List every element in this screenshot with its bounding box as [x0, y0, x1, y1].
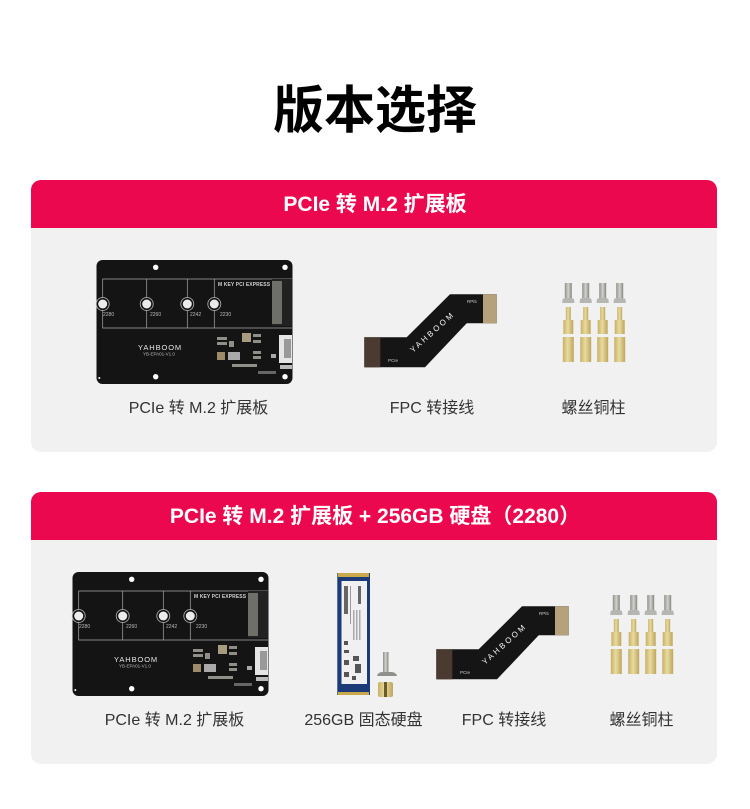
board image: 2260	[150, 312, 161, 318]
FPC cable image: PCIe	[460, 670, 471, 675]
label: PCIe 转 M.2 扩展板	[105, 711, 244, 729]
panel header	[31, 180, 717, 228]
FPC cable image: YAHBOOM	[480, 622, 529, 666]
panel header	[31, 492, 717, 540]
FPC cable image: RPi5	[539, 611, 549, 616]
FPC cable image: PCIe	[388, 358, 399, 363]
board image: YAHBOOM	[138, 343, 182, 352]
label: 螺丝铜柱	[609, 711, 674, 729]
board image: YB-EPA01-V1.0	[143, 352, 175, 356]
label: 螺丝铜柱	[561, 399, 626, 417]
title: 版本选择	[273, 82, 477, 139]
FPC cable image: YAHBOOM	[408, 310, 457, 354]
panel header: PCIe 转 M.2 扩展板 + 256GB 硬盘（2280）	[170, 505, 580, 528]
label: FPC 转接线	[390, 399, 474, 417]
panel header: PCIe 转 M.2 扩展板	[283, 193, 467, 216]
board image: 2230	[196, 624, 207, 630]
board image	[72, 572, 268, 696]
board image: 2230	[220, 312, 231, 318]
board image: 2242	[166, 624, 177, 630]
board image: 2280	[103, 312, 114, 318]
screws and standoffs image	[610, 595, 674, 674]
board image: 2280	[79, 624, 90, 630]
board image	[96, 260, 292, 384]
label: PCIe 转 M.2 扩展板	[129, 399, 268, 417]
FPC cable image	[436, 606, 569, 679]
board image: 2242	[190, 312, 201, 318]
board image: 2260	[126, 624, 137, 630]
label: FPC 转接线	[462, 711, 546, 729]
board image: M KEY PCI EXPRESS	[218, 282, 271, 288]
panel: PCIe to M.2 board version	[31, 180, 717, 452]
mounting screw and nut	[377, 652, 397, 697]
board image: YB-EPA01-V1.0	[119, 664, 151, 668]
panel: board plus SSD version	[31, 492, 717, 764]
FPC cable image	[364, 294, 497, 367]
screws and standoffs image	[562, 283, 626, 362]
FPC cable image: RPi5	[467, 299, 477, 304]
board image: M KEY PCI EXPRESS	[194, 594, 247, 600]
label: 256GB 固态硬盘	[304, 710, 423, 729]
board image: YAHBOOM	[114, 655, 158, 664]
SSD image	[337, 573, 370, 695]
